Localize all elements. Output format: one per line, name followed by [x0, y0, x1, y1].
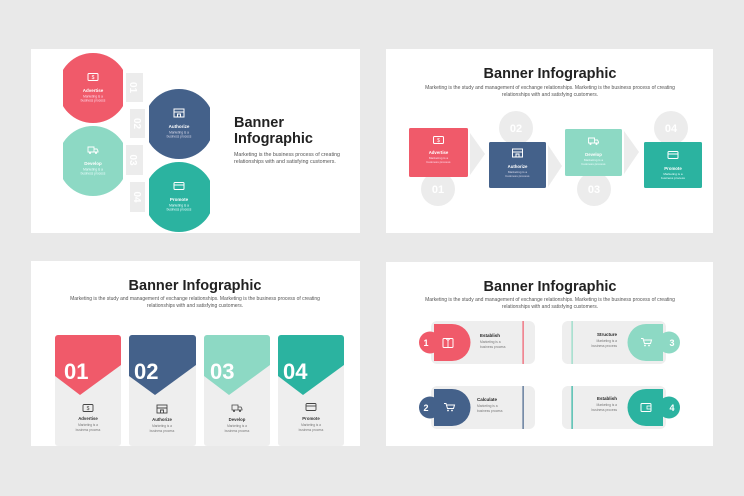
box promote: Promote	[664, 166, 682, 171]
circle: authorize: Authorize	[169, 124, 190, 129]
box advertise	[409, 128, 468, 177]
card 02: 02	[134, 359, 158, 384]
banner 3: 3	[669, 338, 675, 348]
box promote: Marketing is a	[663, 172, 683, 176]
title: Banner	[234, 115, 284, 131]
box authorize: business process	[506, 174, 530, 178]
card 01: Marketing is a	[78, 423, 98, 427]
banner 3	[562, 321, 680, 364]
subtitle	[70, 296, 320, 309]
banner 1: 1	[423, 338, 429, 348]
slide 2: step boxes	[386, 49, 713, 233]
card 04: Marketing is a	[301, 423, 321, 427]
title: Banner Infographic	[484, 279, 616, 295]
banner 1: business process	[480, 345, 506, 349]
banner 4: 4	[669, 403, 675, 413]
box advertise: business process	[427, 160, 451, 164]
number circles	[421, 111, 688, 206]
card 01: Advertise	[78, 416, 98, 421]
banner 1	[419, 321, 535, 364]
banner 4: Marketing is a	[596, 403, 617, 407]
slide 2: step boxes: 03	[588, 184, 600, 196]
card 01: business process	[76, 428, 101, 432]
card 04	[278, 335, 344, 446]
banner 4: Establish	[597, 396, 617, 401]
box authorize: Marketing is a	[508, 170, 527, 174]
subtitle: relationships with and satisfying customers.	[502, 304, 598, 310]
card 02: Authorize	[152, 417, 173, 422]
description	[234, 152, 340, 165]
card 02: business process	[150, 429, 175, 433]
box authorize: Authorize	[508, 164, 528, 169]
banner 2: 2	[423, 403, 429, 413]
number tab 04	[130, 182, 145, 212]
description: Marketing is the business process of creating	[234, 152, 340, 158]
banner 2: Marketing is a	[477, 404, 498, 408]
banner 3: business process	[592, 344, 617, 348]
number tab 01	[126, 73, 143, 102]
card 04: business process	[299, 428, 324, 432]
subtitle: relationships with and satisfying customers.	[502, 92, 598, 98]
card 03	[204, 335, 270, 446]
banner 1: Marketing is a	[480, 340, 501, 344]
slide 2: step boxes: 02	[510, 123, 522, 135]
circle: develop: business process	[81, 172, 106, 176]
subtitle	[425, 85, 675, 98]
slide 4: numbered banners	[386, 262, 713, 446]
slide 2: step boxes: 01	[432, 184, 444, 196]
title: Banner Infographic	[484, 66, 616, 82]
card 02: Marketing is a	[152, 424, 172, 428]
banner 2: business process	[477, 409, 503, 413]
card 03: business process	[225, 429, 250, 433]
box authorize	[489, 142, 546, 188]
number tab 02	[130, 109, 145, 138]
number tab 02: 02	[131, 118, 142, 129]
title: Banner Infographic	[129, 278, 261, 294]
number tab 01: 01	[127, 82, 138, 93]
box develop: business process	[582, 162, 606, 166]
banner 2	[419, 386, 535, 429]
slide 2: step boxes: 04	[665, 123, 678, 135]
circle: promote	[149, 162, 210, 232]
circle: promote: Marketing is a	[169, 204, 189, 208]
card 03: Develop	[229, 417, 246, 422]
box develop	[565, 129, 622, 176]
slide 1: circle banner	[31, 49, 360, 233]
card 03: 03	[210, 359, 234, 384]
circle: authorize: Marketing is a	[169, 130, 189, 134]
card 03: Marketing is a	[227, 424, 247, 428]
circle: promote: business process	[167, 208, 192, 212]
banner 3: Marketing is a	[596, 339, 617, 343]
card 01: 01	[64, 359, 88, 384]
banner 2: Calculate	[477, 397, 498, 402]
circle: advertise	[63, 53, 123, 123]
subtitle	[425, 297, 675, 310]
number tab 04: 04	[131, 191, 142, 203]
slide 3: number cards	[31, 261, 360, 446]
banner 3: Structure	[597, 332, 617, 337]
box advertise: Marketing is a	[429, 156, 448, 160]
description: relationships with and satisfying customers.	[234, 159, 336, 165]
box develop: Develop	[585, 152, 602, 157]
card 01	[55, 335, 121, 446]
subtitle: Marketing is the study and management of exchange relationships. Marketing is the business process of creating	[70, 296, 320, 302]
subtitle: relationships with and satisfying customers.	[147, 303, 243, 309]
number tab 03	[126, 145, 143, 175]
banner 4	[562, 386, 680, 429]
card 04: Promote	[302, 416, 320, 421]
subtitle: Marketing is the study and management of exchange relationships. Marketing is the business process of creating	[425, 297, 675, 303]
circle: promote: Promote	[170, 197, 189, 202]
circle: develop	[63, 126, 123, 196]
card 02	[129, 335, 196, 446]
circle: authorize: business process	[167, 134, 192, 138]
title	[234, 115, 313, 147]
title: Infographic	[234, 131, 313, 147]
chevron arrows	[470, 131, 639, 187]
circle: authorize	[149, 89, 210, 159]
banner 1: Establish	[480, 333, 500, 338]
circle: advertise: Advertise	[83, 88, 104, 93]
circle: develop: Develop	[84, 161, 102, 166]
box advertise: Advertise	[429, 150, 449, 155]
box develop: Marketing is a	[584, 158, 603, 162]
banner 4: business process	[592, 408, 617, 412]
circle: develop: Marketing is a	[83, 168, 103, 172]
box promote: business process	[661, 176, 685, 180]
circle: advertise: Marketing is a	[83, 94, 103, 98]
number tab 03: 03	[127, 154, 138, 166]
circle: advertise: business process	[81, 98, 106, 102]
card 04: 04	[283, 359, 308, 384]
subtitle: Marketing is the study and management of exchange relationships. Marketing is the business process of creating	[425, 85, 675, 91]
box promote	[644, 142, 702, 188]
card 01: $	[87, 406, 90, 412]
